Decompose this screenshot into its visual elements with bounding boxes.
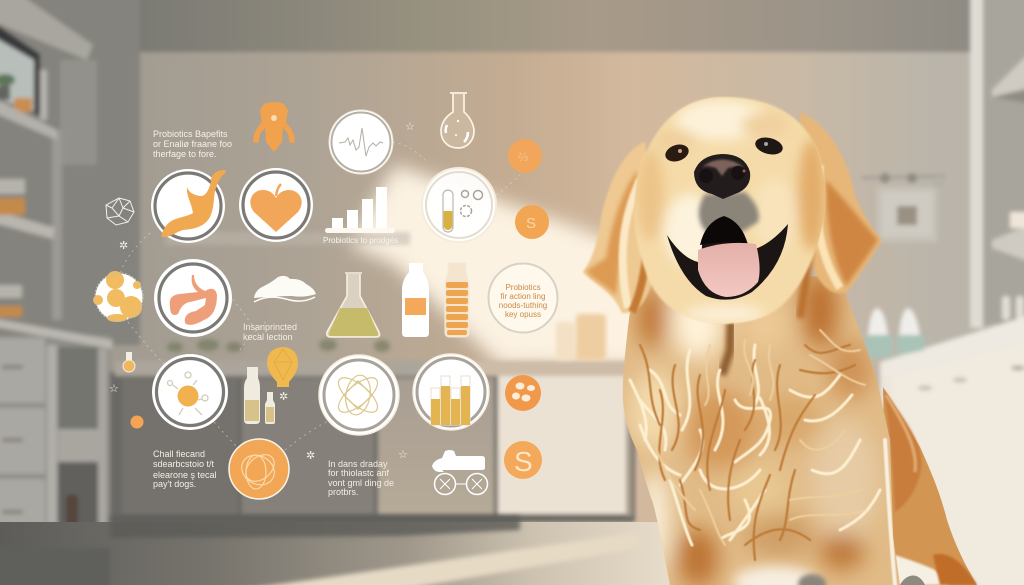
text: probiotics benefits: Probiotics Bapefits: [153, 129, 228, 139]
dark neck line: [722, 318, 731, 375]
circle: heart icon: [239, 168, 313, 242]
fur strands: [630, 330, 895, 585]
orange circle top right: [508, 139, 542, 173]
bar chart: [323, 187, 398, 245]
right side shelves and counter: [862, 0, 1024, 585]
orange circle: pills: [505, 375, 541, 411]
icon: polyhedron outline: [106, 198, 134, 225]
circle: text badge: key opuss: [505, 310, 541, 319]
orange dot: [130, 416, 144, 428]
text: intestinal function: kecal lection: [243, 332, 293, 342]
golden retriever dog: [583, 97, 977, 585]
icon: sparkle: ✲: [119, 240, 128, 252]
icon: bottles: [244, 367, 275, 424]
right eye: [753, 135, 785, 157]
text: probiotics benefits: [153, 129, 232, 159]
dog body: [610, 270, 910, 585]
icon: sparkle: ✲: [306, 450, 315, 462]
text: lower centre: In dans draday: [328, 459, 388, 469]
text: intestinal function: Insanprincted: [243, 322, 297, 332]
circle: wave pulse: [329, 110, 393, 174]
orange circle: S: S: [514, 446, 533, 477]
shelves: [0, 98, 57, 140]
icon: cloud powder: [254, 276, 316, 302]
intestine shape: [170, 275, 217, 325]
stomach shape: [162, 170, 226, 237]
circle: text badge: Probiotics: [505, 283, 541, 292]
icon: truck on wheels: [432, 450, 488, 494]
caption: Probiotics to prodgés: [323, 236, 398, 245]
icon: orange dog figure: [253, 102, 295, 152]
text: lower left: pay't dogs.: [153, 479, 196, 489]
icon: light bulb: [267, 347, 298, 387]
ceiling: [130, 0, 975, 52]
grey under belly: [798, 574, 826, 585]
orange circle: knot: [229, 439, 289, 499]
right ear: [800, 112, 882, 318]
colour patches: [629, 272, 879, 585]
shelf mid wall: [165, 232, 410, 245]
head: [634, 97, 826, 324]
left eye: [663, 142, 691, 164]
circle: molecule: [152, 354, 228, 430]
connecting dashed arcs: [120, 142, 520, 450]
nose: [694, 154, 750, 199]
icon: sparkle: ✲: [279, 391, 288, 403]
pale lower centre: [733, 566, 817, 585]
icon: small flask: [123, 352, 135, 372]
window: [0, 24, 40, 116]
text: lower left: [153, 449, 217, 489]
text: probiotics benefits: or Enaliø fraane foo: [153, 139, 232, 149]
icon: star: ☆: [405, 121, 415, 133]
circle: text badge: noods-tuthing: [499, 301, 547, 310]
mouth: [667, 216, 788, 300]
text: lower left: elearone ş tecal: [153, 470, 217, 480]
text: lower centre: [328, 459, 394, 497]
left ear: [583, 142, 656, 313]
pale chest edge: [885, 440, 895, 585]
circle: text badge: [488, 264, 558, 332]
tongue: [698, 243, 760, 297]
heart shape: [250, 190, 302, 232]
light beam: [350, 165, 660, 365]
icon: star: ☆: [398, 449, 408, 461]
text: lower centre: for thiolastc anf: [328, 468, 390, 478]
grey muzzle fur: [699, 192, 759, 232]
circle: intestine: [154, 259, 232, 337]
text: intestinal function: [243, 322, 297, 342]
floor: [0, 516, 1024, 585]
orange circle: S: [504, 441, 542, 479]
jars: [0, 179, 25, 194]
text: lower left: Chall fiecand: [153, 449, 205, 459]
icon: conical flask: [327, 273, 380, 337]
left counter and drawers: [0, 318, 113, 567]
icon: round flask: [441, 93, 474, 148]
plants on counter: [167, 339, 390, 352]
microbes: [460, 190, 482, 216]
yellow cell circle: [93, 271, 143, 322]
circle: atom: [319, 355, 399, 435]
orange circle with S: [515, 205, 549, 239]
pulse line: [339, 128, 383, 156]
bars: [332, 187, 387, 228]
icon: star: ☆: [109, 383, 119, 395]
orange circle top right: ⅔: [518, 150, 528, 164]
circle: text badge: fir action ling: [501, 292, 545, 301]
circle: stomach icon: [151, 169, 226, 243]
text: probiotics benefits: therfage to fore.: [153, 149, 217, 159]
text: lower centre: vont gml ding de: [328, 478, 394, 488]
circle: test tube and microbes: [422, 168, 496, 242]
orange circle with S: S: [526, 215, 536, 232]
text: lower left: sdearbcstoio t/t: [153, 459, 215, 469]
text: lower centre: protbrs.: [328, 487, 359, 497]
top ledge: [0, 0, 93, 60]
icon: white bottle with orange label: [402, 263, 429, 337]
hind leg and tail: [883, 387, 977, 585]
test tube: [443, 190, 453, 232]
main cabinets: [110, 361, 640, 522]
left wall and shelf unit: [0, 0, 140, 345]
icon: orange ribbed bottle: [445, 263, 469, 337]
circle: test tube bars: [413, 354, 489, 430]
counter jars: [556, 314, 606, 360]
